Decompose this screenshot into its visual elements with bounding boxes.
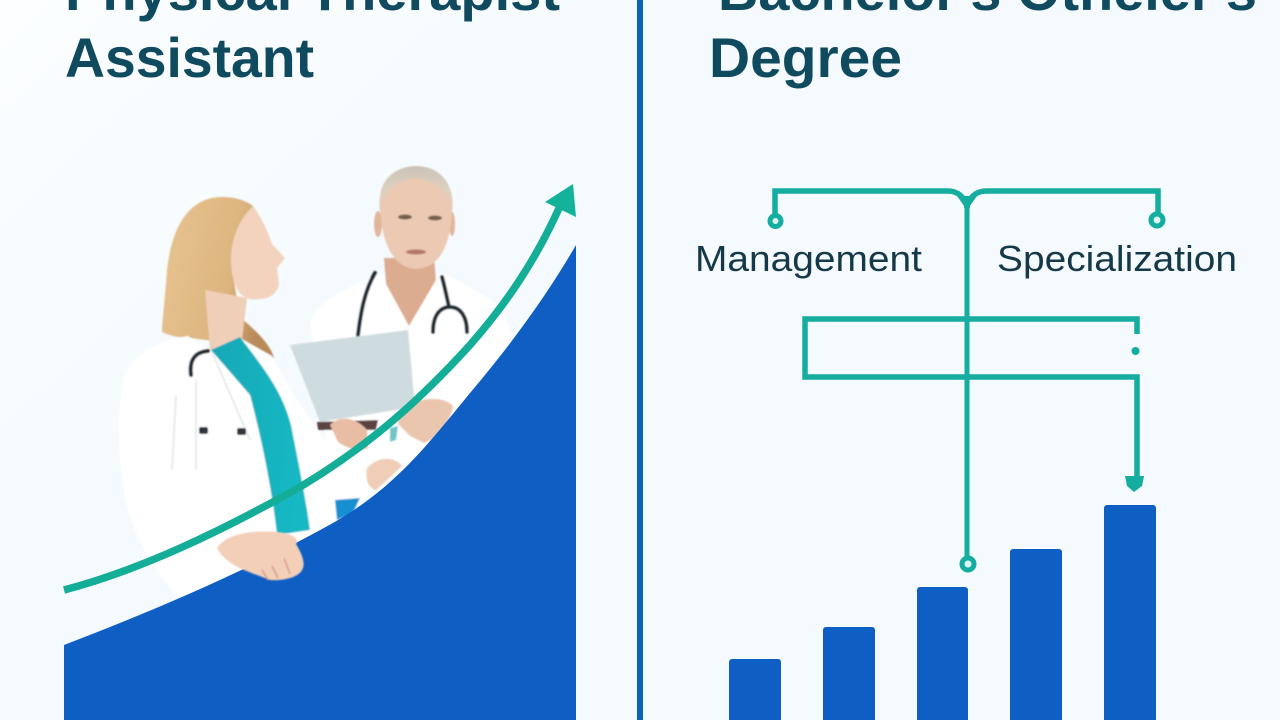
panel: bachelor's degree	[695, 0, 1257, 720]
woman: teal scrubs	[211, 337, 310, 535]
bar 3	[917, 587, 968, 720]
bar 2	[823, 627, 875, 720]
heading: bachelor's degree: Degree	[709, 26, 902, 89]
tablet	[290, 330, 415, 422]
man: coat	[310, 274, 520, 470]
woman: stethoscope	[191, 351, 208, 375]
woman: coat pocket	[335, 498, 360, 520]
node: dot	[1132, 347, 1140, 355]
branch: loop	[805, 319, 1137, 480]
bar 5	[1104, 505, 1156, 720]
bar chart	[729, 505, 1156, 720]
branch: junction wedge	[957, 196, 977, 210]
node: management	[770, 216, 781, 226]
heading: physical therapist assistant: Assistant	[65, 26, 314, 89]
man: eyes and mouth	[398, 214, 442, 254]
blue growth area	[64, 245, 576, 720]
green growth arrow	[64, 184, 576, 590]
branch: trunk	[964, 205, 970, 558]
label: management: Management	[695, 238, 922, 279]
woman: stethoscope tips	[199, 427, 246, 435]
woman: hand on tablet	[330, 419, 368, 450]
career path connectors	[770, 191, 1163, 570]
woman: white coat	[119, 336, 378, 610]
man: head	[380, 167, 452, 269]
node: trunk end	[962, 558, 974, 570]
woman: hand over blue area	[217, 532, 304, 580]
arrowhead: to tallest bar	[1125, 476, 1144, 492]
arrowhead	[545, 184, 576, 217]
node: specialization	[1151, 214, 1163, 226]
tablet base	[317, 420, 378, 430]
center divider	[637, 0, 643, 720]
woman: face profile	[231, 206, 285, 299]
bar 1	[729, 659, 781, 720]
label: specialization: Specialization	[997, 238, 1237, 279]
man: ears	[374, 211, 455, 237]
man: bald crown	[379, 166, 453, 212]
woman: far hand	[366, 459, 402, 490]
panel: physical therapist assistant	[64, 0, 576, 720]
bar 4	[1010, 549, 1062, 720]
woman: coat shading	[172, 352, 250, 470]
woman: neck	[205, 290, 247, 357]
man: hands	[398, 399, 453, 443]
branch: top split	[775, 191, 1158, 214]
man: name badge	[390, 426, 398, 442]
woman: hair back	[162, 197, 274, 358]
man: stethoscope	[358, 273, 467, 335]
man: neck and chest	[384, 258, 436, 326]
woman: finger lines	[262, 558, 290, 580]
illustration: two clinicians	[119, 166, 520, 610]
